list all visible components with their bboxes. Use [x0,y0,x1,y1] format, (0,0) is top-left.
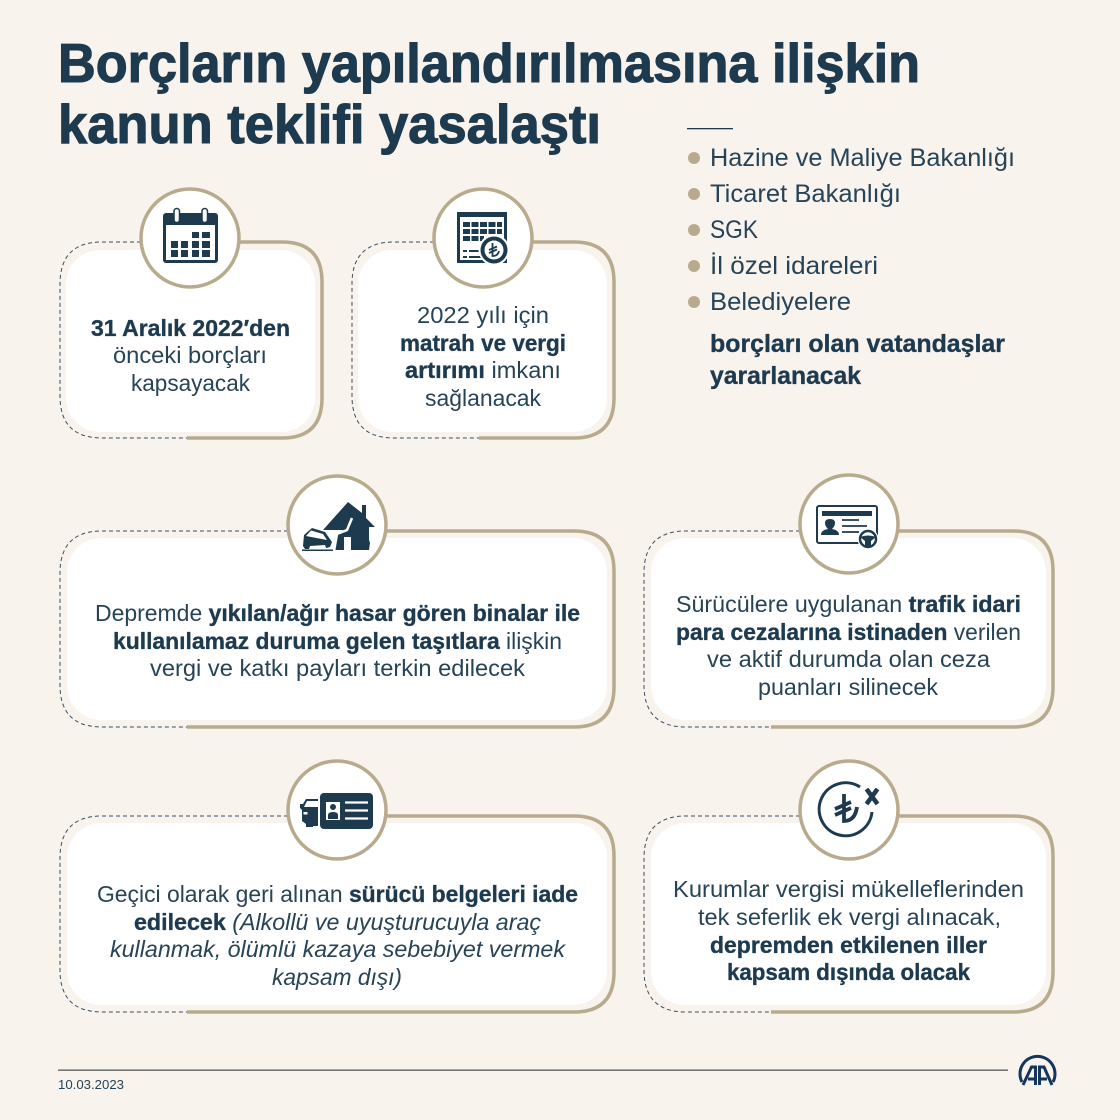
card text: ve aktif durumda olan ceza [707,646,990,672]
card text: para cezalarına istinaden verilen [676,619,1021,645]
list conclusion: yararlanacak [710,362,861,390]
card text [91,315,290,396]
list item: SGK [688,216,758,244]
list item: İl özel idareleri: İl özel idareleri [710,251,878,280]
date: 10.03.2023 [58,1078,124,1092]
card text: Depremde yıkılan/ağır hasar gören binalar ile [95,600,580,626]
list item: SGK: SGK [710,216,758,244]
panel: matrah ve vergi artırımı [352,189,614,438]
title: kanun teklifi yasalaştı [58,93,601,155]
icon: driver licence with steering wheel [817,506,878,550]
title: Borçların yapılandırılmasına ilişkin [58,32,920,94]
footer [58,1056,1055,1092]
card text: Sürücülere uygulanan trafik idari [676,591,1021,617]
card text: puanları silinecek [758,674,938,700]
card text [97,881,578,990]
title [58,32,920,155]
icon: AA logo [1020,1056,1055,1085]
list conclusion: borçları olan vatandaşlar [710,330,1005,358]
panel: sürücü belgeleri [60,761,614,1012]
card text: sağlanacak [425,385,541,411]
card text: 2022 yılı için [417,302,549,328]
panel: trafik cezaları [644,475,1053,727]
icon: lira with multiplier [819,783,878,836]
card text [676,591,1021,700]
panel: beneficiaries list [687,128,1015,390]
panel: kurumlar vergisi [644,761,1053,1012]
card text: kapsayacak [131,370,250,396]
card text: vergi ve katkı payları terkin edilecek [150,655,526,681]
icon: car and licence card [300,793,373,829]
card text: önceki borçları [113,342,267,368]
card text: edilecek (Alkollü ve uyuşturucuyla araç [134,909,541,935]
list item: Hazine ve Maliye Bakanlığı: Hazine ve Maliye Bakanlığı [710,144,1015,172]
list item: Ticaret Bakanlığı: Ticaret Bakanlığı [710,180,901,208]
card text: 31 Aralık 2022′den [91,315,290,341]
panel: deprem binalar ve taşıtlar [60,476,614,727]
card text: kullanmak, ölümlü kazaya sebebiyet vermek [110,936,567,962]
icon: calendar with lira coin [457,212,510,266]
card text [673,876,1024,985]
card text: kullanılamaz duruma gelen taşıtlara ilişkin [113,628,562,654]
card text: kapsam dışında olacak [727,959,970,985]
card text: artırımı imkanı [405,357,561,383]
card text: depremden etkilenen iller [710,932,987,958]
card text: Kurumlar vergisi mükelleflerinden [673,876,1024,902]
card text: matrah ve vergi [400,330,566,356]
icon: calendar [163,208,218,263]
list item: Belediyelere: Belediyelere [710,288,851,316]
list conclusion [710,330,1005,390]
card text: tek seferlik ek vergi alınacak, [698,904,1001,930]
card text: Geçici olarak geri alınan sürücü belgeleri iade [97,881,578,907]
card text: kapsam dışı) [272,964,402,990]
panel: 31 Aralık 2022 [60,189,322,438]
card text [400,302,566,411]
icon: damaged house and car [302,502,375,551]
card text [95,600,580,681]
